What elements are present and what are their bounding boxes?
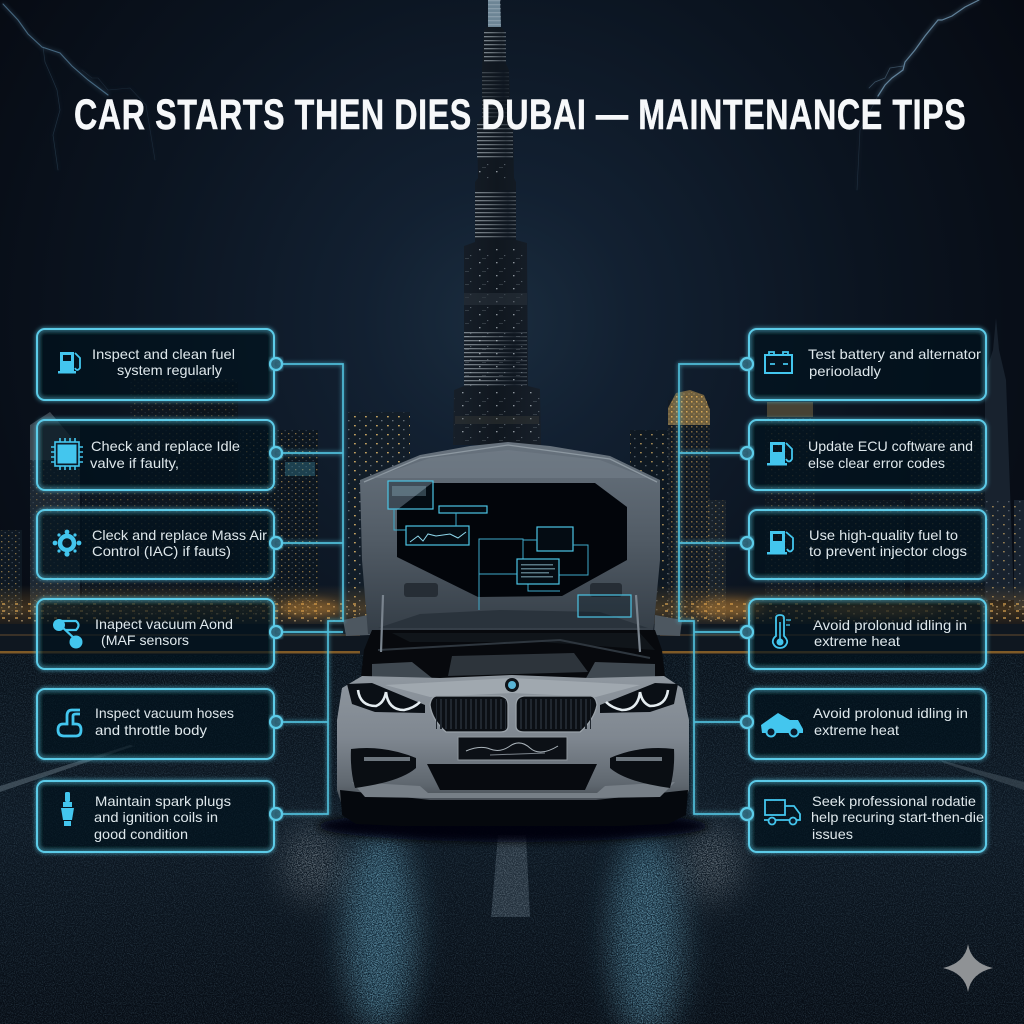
text [95, 616, 233, 648]
icon: battery [765, 352, 792, 373]
connector node [741, 537, 753, 549]
icon: fuel pump [767, 531, 793, 554]
city lights glow band [0, 585, 1024, 655]
connector node [741, 716, 753, 728]
text: Update ECU coftware and [808, 438, 973, 454]
text [813, 705, 968, 738]
text: to prevent injector clogs [809, 543, 967, 559]
text [95, 705, 234, 738]
HUD overlay [388, 481, 631, 617]
connector node [270, 716, 282, 728]
text: periooladly [809, 363, 881, 379]
tyres and lower shadow [340, 790, 688, 826]
panel: vacuum hoses and throttle [37, 689, 282, 759]
hood inner window [397, 483, 627, 597]
panel: inspect vacuum and MAF [37, 599, 282, 669]
text: issues [812, 826, 853, 842]
text: valve if faulty, [90, 455, 179, 471]
icon: sparkle watermark [943, 944, 993, 992]
car shadow [318, 810, 708, 842]
text [809, 527, 967, 559]
text: and throttle body [95, 722, 207, 738]
text [808, 346, 981, 379]
text: Seek professional rodatie [812, 793, 976, 809]
text: Control (IAC) if fauts) [92, 543, 231, 559]
icon: sensor gear [53, 530, 81, 557]
car body [337, 675, 689, 815]
panel: avoid idling heat [741, 599, 986, 669]
text [808, 438, 973, 471]
engine parts [372, 633, 655, 680]
icon: delivery truck [764, 800, 800, 824]
text [94, 793, 231, 842]
text: else clear error codes [808, 455, 945, 471]
connector node [741, 447, 753, 459]
text [90, 438, 240, 471]
connector node [741, 626, 753, 638]
panel: avoid idling, tow truck [741, 689, 986, 759]
text: Avoid prolonud idling in [813, 617, 967, 633]
icon: fuel pump [767, 442, 792, 466]
lightning: left [3, 4, 155, 170]
text: Check and replace Idle [91, 438, 240, 454]
panel: seek professional help [741, 781, 986, 852]
lower air intake [427, 764, 597, 790]
title: CAR STARTS THEN DIES DUBAI — MAINTENANCE TIPS [74, 92, 966, 139]
text: Inspect vacuum hoses [95, 705, 234, 721]
icon: vacuum connectors [53, 619, 82, 648]
city skyline: left [0, 378, 410, 617]
panel: spark plugs and coils [37, 781, 282, 852]
licence plate [458, 737, 567, 760]
text: Cleck and replace Mass Air [92, 527, 267, 543]
hood crease highlights [364, 445, 657, 482]
connector node [741, 358, 753, 370]
panel: check idle valve [37, 420, 282, 490]
text [813, 617, 967, 649]
road light reflections [282, 824, 742, 1024]
connector node [270, 447, 282, 459]
open hood [360, 442, 660, 634]
text [811, 793, 984, 842]
text: help recuring start-then-die [811, 809, 984, 825]
text: Maintain spark plugs [95, 793, 231, 809]
text [92, 527, 267, 559]
lightning: right [857, 0, 979, 190]
text: Avoid prolonud idling in [813, 705, 968, 721]
connector lines: left [276, 364, 343, 814]
BMW logo [505, 678, 519, 692]
side mirrors [343, 615, 682, 636]
connector node [270, 537, 282, 549]
icon: dump truck [761, 713, 803, 736]
Burj tower [453, 0, 541, 445]
text: Use high-quality fuel to [809, 527, 958, 543]
icon: spark plug [61, 792, 74, 826]
text: good condition [94, 826, 188, 842]
bonnet lip [385, 678, 640, 697]
panel: mass air control [37, 510, 282, 579]
kidney grille [430, 696, 597, 732]
text: system regularly [117, 362, 222, 378]
icon: fuel pump [58, 352, 80, 374]
left fog intake [351, 748, 416, 788]
connector node [270, 358, 282, 370]
lower bumper lip [352, 782, 675, 798]
panel: high-quality fuel [741, 510, 986, 579]
hood vents [404, 583, 622, 597]
hood top band [372, 450, 648, 478]
hood struts [381, 595, 640, 652]
text: Inspect and clean fuel [92, 346, 235, 362]
engine bay [360, 630, 666, 686]
connector node [270, 626, 282, 638]
text: Inapect vacuum Aond [95, 616, 233, 632]
panel: test battery [741, 329, 986, 400]
text: extreme heat [814, 633, 900, 649]
connector node [741, 808, 753, 820]
panel: inspect fuel system [37, 329, 282, 400]
icon: thermometer [773, 615, 791, 648]
city skyline: right [630, 318, 1024, 620]
car [318, 442, 708, 842]
text [92, 346, 235, 378]
text: and ignition coils in [94, 809, 218, 825]
connector lines: right [679, 364, 747, 814]
text: (MAF sensors [101, 632, 189, 648]
right fog intake [610, 748, 674, 788]
icon: chip [51, 438, 83, 470]
text: Test battery and alternator [808, 346, 981, 362]
icon: hose [58, 710, 81, 736]
left headlight [347, 683, 425, 713]
text: extreme heat [814, 722, 899, 738]
windshield strip [378, 610, 648, 628]
right headlight [600, 683, 678, 713]
connector node [270, 808, 282, 820]
asphalt road [0, 655, 1024, 1024]
panel: update ECU [741, 420, 986, 490]
